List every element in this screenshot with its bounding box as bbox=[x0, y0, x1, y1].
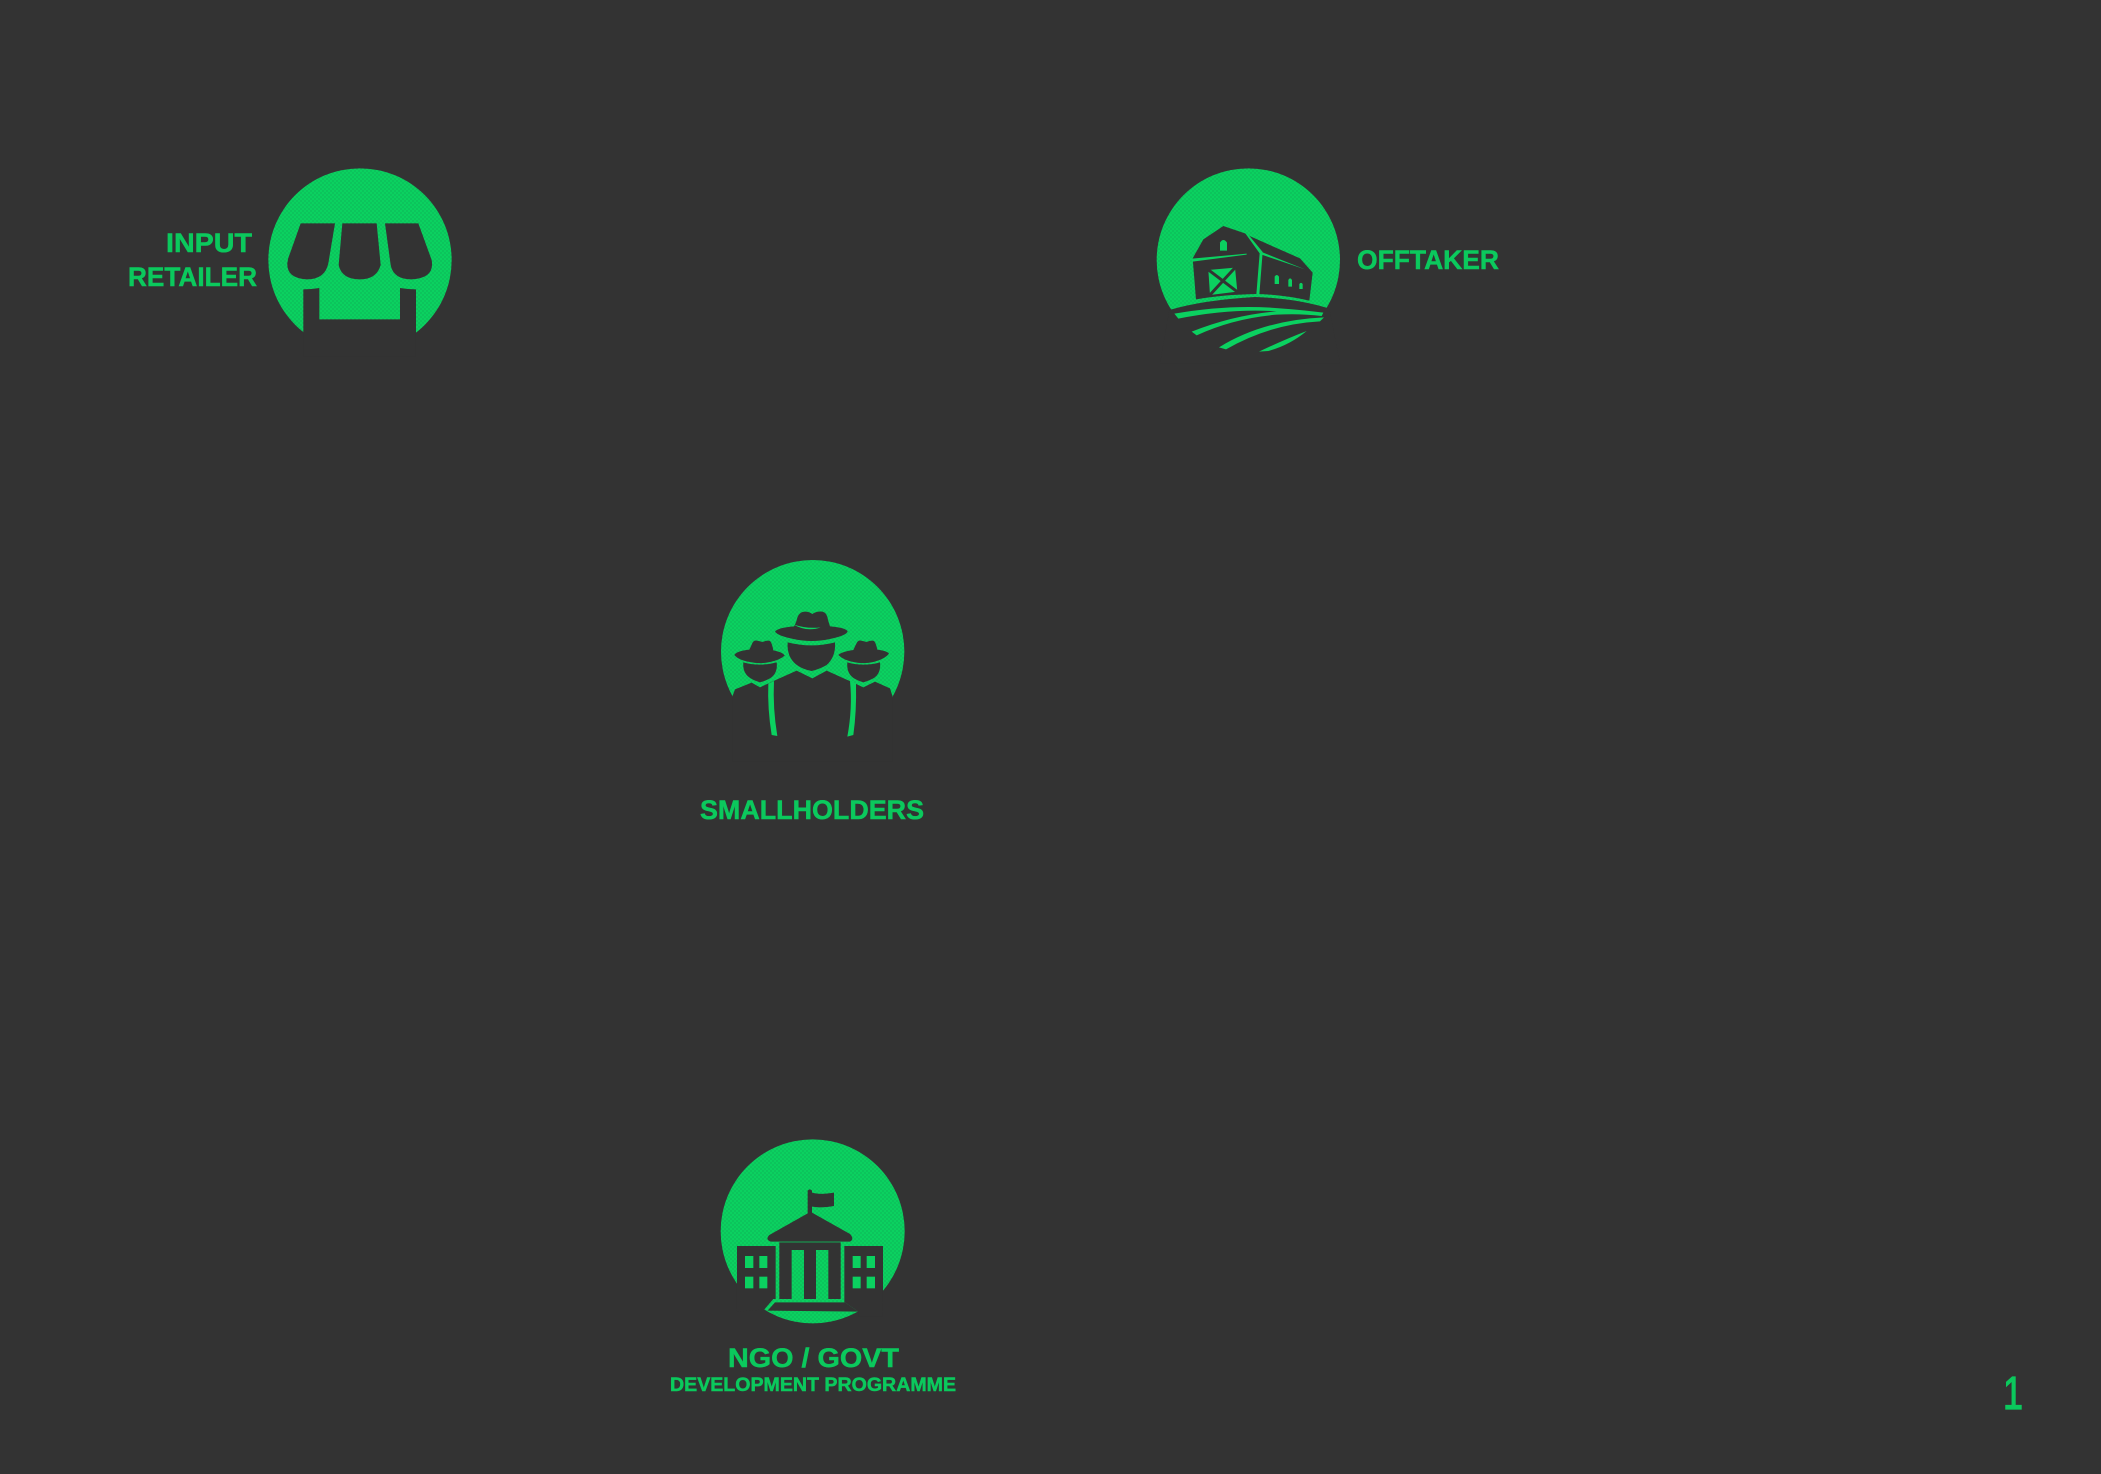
field stripes bbox=[1174, 307, 1324, 352]
barn bbox=[1193, 226, 1313, 301]
icon: government building bbox=[721, 1139, 905, 1323]
right wing bbox=[844, 1246, 883, 1317]
farmer centre bbox=[775, 612, 848, 671]
label: retailer: RETAILER bbox=[128, 262, 257, 292]
barn lines bbox=[1192, 233, 1305, 295]
gaps between bodies bbox=[768, 681, 856, 737]
windows bbox=[745, 1256, 875, 1288]
panel: input retailer bbox=[128, 168, 452, 357]
panel: smallholders bbox=[700, 560, 924, 825]
barn door bbox=[1208, 267, 1238, 296]
roof bbox=[767, 1213, 852, 1242]
hillside cutout bbox=[1160, 297, 1340, 363]
steps bbox=[768, 1302, 858, 1312]
barn windows bbox=[1220, 240, 1303, 289]
page number: 1 bbox=[2003, 1367, 2023, 1419]
panel: offtaker bbox=[1157, 168, 1499, 363]
label: development programme: DEVELOPMENT PROGRAMME bbox=[670, 1374, 956, 1396]
main hall bbox=[779, 1242, 841, 1299]
label: offtaker: OFFTAKER bbox=[1357, 245, 1499, 275]
label: ngo / govt: NGO / GOVT bbox=[728, 1343, 899, 1373]
shop front cutout bbox=[303, 288, 416, 357]
icon: three farmers with hats bbox=[721, 560, 904, 762]
awning right bbox=[385, 223, 432, 279]
farmer left bbox=[734, 641, 785, 682]
centre hat band bbox=[793, 624, 821, 629]
label: smallholders: SMALLHOLDERS bbox=[700, 795, 924, 825]
awning left bbox=[287, 223, 335, 279]
flag bbox=[808, 1189, 834, 1215]
left wing bbox=[737, 1246, 776, 1312]
bodies cutout bbox=[733, 671, 892, 762]
awning middle bbox=[339, 223, 381, 279]
panel: ngo / govt bbox=[670, 1139, 956, 1396]
label: input: INPUT bbox=[166, 228, 252, 258]
icon: barn and fields bbox=[1157, 168, 1340, 363]
farmer right bbox=[838, 641, 889, 682]
icon: shop with awning bbox=[268, 168, 452, 357]
